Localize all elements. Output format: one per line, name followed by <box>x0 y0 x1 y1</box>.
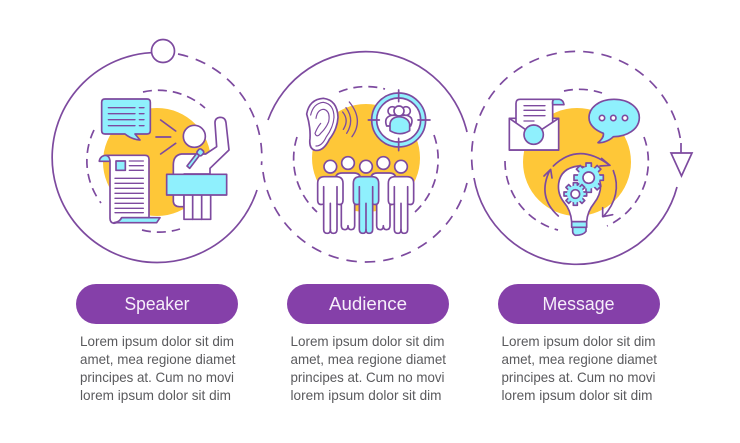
ring: audience outer circle <box>263 52 467 262</box>
icon: chat bubble <box>589 99 639 143</box>
arrow: triangle marker <box>671 143 692 176</box>
ring: message outer circle <box>472 51 681 264</box>
text block: audience description <box>290 333 446 403</box>
ring: audience inner dashed circle <box>294 87 438 212</box>
button: Audience: Audience <box>329 294 407 314</box>
icon: light bulb <box>558 166 601 235</box>
button: Message <box>498 284 660 324</box>
icon: small gear <box>564 183 587 205</box>
text block: message description: principes at. Cum no movi <box>502 369 656 385</box>
icon: crowd of five people <box>318 157 414 233</box>
panel: speaker <box>52 40 262 403</box>
icon: ear, target and crowd <box>307 90 430 233</box>
ring: message inner dashed circle <box>505 89 648 230</box>
text block: audience description: lorem ipsum dolor sit dim <box>290 387 442 403</box>
icon: paper scroll <box>99 155 160 223</box>
arrow: circular process arrows <box>544 154 616 217</box>
panel: message <box>472 51 692 403</box>
text block: message description: amet, mea regione diamet <box>502 351 657 367</box>
panel: audience <box>263 52 467 403</box>
text block: audience description: amet, mea regione diamet <box>290 351 446 367</box>
icon: presenter <box>167 117 229 219</box>
icon: speech bubble <box>102 99 150 140</box>
icon: large gear <box>574 163 603 192</box>
icon: target with group <box>368 90 430 151</box>
ring: speaker outer circle <box>52 40 262 263</box>
text block: audience description: principes at. Cum no movi <box>290 369 444 385</box>
text block: speaker description: lorem ipsum dolor sit dim <box>80 387 231 403</box>
text block: message description: Lorem ipsum dolor sit dim <box>502 333 656 349</box>
icon: sound rays <box>156 120 176 154</box>
text block: message description <box>502 333 657 403</box>
button: Message: Message <box>542 294 614 314</box>
text block: speaker description: principes at. Cum no movi <box>80 369 234 385</box>
icon: envelope, chat bubble and idea bulb <box>509 99 639 235</box>
ring: speaker inner dashed circle <box>87 90 205 232</box>
icon: envelope with letter <box>509 99 564 150</box>
button: Speaker: Speaker <box>124 294 190 314</box>
icon: sound waves <box>343 102 357 137</box>
text block: message description: lorem ipsum dolor sit dim <box>502 387 652 403</box>
button: Speaker <box>76 284 238 324</box>
text block: speaker description: amet, mea regione diamet <box>80 351 236 367</box>
text block: speaker description <box>80 333 236 403</box>
icon: ear <box>307 98 338 150</box>
text block: audience description: Lorem ipsum dolor sit dim <box>290 333 444 349</box>
icon: speaker at podium with document <box>99 99 229 223</box>
yellow disc: audience <box>312 104 420 212</box>
yellow disc: message <box>523 108 631 216</box>
text block: speaker description: Lorem ipsum dolor sit dim <box>80 333 234 349</box>
yellow disc: speaker <box>103 108 211 216</box>
button: Audience <box>287 284 449 324</box>
